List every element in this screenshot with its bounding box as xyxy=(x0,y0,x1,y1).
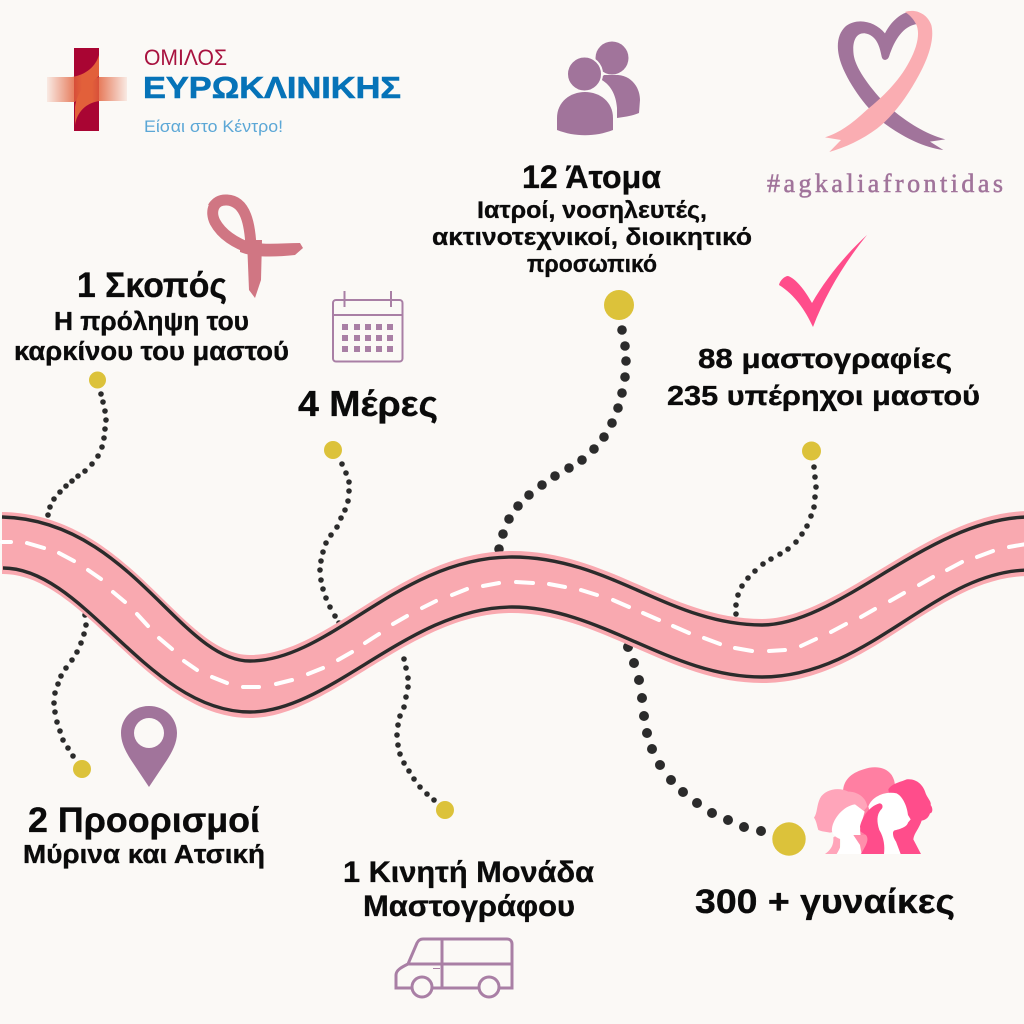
block: 1 Σκοπός: Η πρόληψη του xyxy=(54,308,249,336)
road edge: bottom black line xyxy=(3,568,1024,712)
icon: location pin xyxy=(121,706,177,787)
block: 88 μαστογραφίες: 88 μαστογραφίες xyxy=(698,343,952,374)
connector: thick dotted line from the road to 300 + γυναίκες xyxy=(623,642,766,836)
heading: 4 Μέρες: 4 Μέρες xyxy=(298,383,438,424)
marker dot: 2 Προορισμοί xyxy=(73,760,91,778)
marker dot: 300 + γυναίκες xyxy=(772,822,806,856)
icon: calendar xyxy=(333,291,402,362)
icon: pink ribbon xyxy=(208,196,303,298)
logo wordmark xyxy=(143,45,401,136)
connector: thick dotted line from 12 Άτομα to the road xyxy=(494,325,631,554)
icon: people xyxy=(557,42,640,135)
icon: van xyxy=(396,939,512,997)
logo: Όμιλος Ευρωκλινικής xyxy=(47,45,401,136)
logo wordmark: ΟΜΙΛΟΣ xyxy=(144,45,227,70)
block: 12 Άτομα xyxy=(432,159,752,278)
marker dot: 4 Μέρες xyxy=(324,441,342,459)
hashtag: #agkaliafrontidas xyxy=(767,169,1003,198)
block: 2 Προορισμοί xyxy=(23,801,265,869)
block: 12 Άτομα: ακτινοτεχνικοί, διοικητικό xyxy=(432,224,752,251)
block: 12 Άτομα: Ιατροί, νοσηλευτές, xyxy=(477,197,707,224)
logo wordmark: Είσαι στο Κέντρο! xyxy=(144,117,283,136)
marker dot: 12 Άτομα xyxy=(604,290,634,320)
block: 1 Σκοπός: 1 Σκοπός xyxy=(77,266,227,305)
marker dot: 88 μαστογραφίες xyxy=(802,442,821,460)
connector: dotted line from 4 Μέρες to the road xyxy=(317,461,352,626)
connector: dotted line from the road to 1 Κινητή Μονάδα xyxy=(394,656,437,803)
marker dot: 1 Κινητή Μονάδα xyxy=(436,801,454,819)
block: 1 Κινητή Μονάδα Μαστογράφου xyxy=(343,856,595,923)
block: 2 Προορισμοί: Μύρινα και Ατσική xyxy=(23,841,265,869)
block: 1 Σκοπός: καρκίνου του μαστού xyxy=(14,338,289,366)
marker dot: 1 Σκοπός xyxy=(89,372,106,388)
road xyxy=(2,511,1024,718)
block: 1 Κινητή Μονάδα Μαστογράφου: Μαστογράφου xyxy=(363,890,575,923)
connector: dotted line from 1 Σκοπός to the road xyxy=(45,391,109,518)
connector: dotted line from the road to 2 Προορισμοί xyxy=(51,604,89,759)
icon: check mark xyxy=(779,235,867,327)
block: 1 Σκοπός xyxy=(14,266,289,366)
road edge: top black line xyxy=(2,517,1024,661)
block: 2 Προορισμοί: 2 Προορισμοί xyxy=(28,801,260,840)
logo cross mark xyxy=(47,48,127,131)
connector: dotted line from 88 μαστογραφίες to the road xyxy=(733,464,819,617)
icon: women silhouettes xyxy=(814,767,932,854)
block: 12 Άτομα: προσωπικό xyxy=(527,251,657,278)
icon: heart ribbon xyxy=(825,11,945,152)
block: 88 μαστογραφίες xyxy=(667,343,980,411)
block: 1 Κινητή Μονάδα Μαστογράφου: 1 Κινητή Μονάδα xyxy=(343,856,595,889)
logo wordmark: ΕΥΡΩΚΛΙΝΙΚΗΣ xyxy=(143,70,401,105)
heading: 300 + γυναίκες: 300 + γυναίκες xyxy=(695,883,955,921)
block: 88 μαστογραφίες: 235 υπέρηχοι μαστού xyxy=(667,380,980,411)
block: 12 Άτομα: 12 Άτομα xyxy=(522,159,661,195)
road centre dashes xyxy=(2,542,1024,687)
